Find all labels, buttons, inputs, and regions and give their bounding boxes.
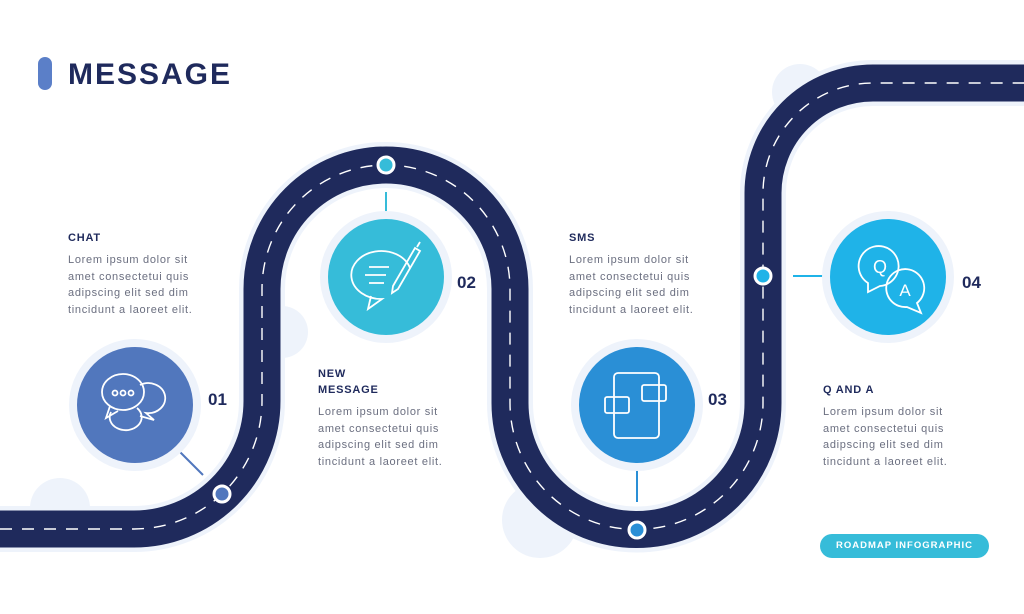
text: new message: tincidunt a laoreet elit. — [318, 456, 443, 468]
circle 04: q and a — [822, 211, 954, 343]
text: q and a: tincidunt a laoreet elit. — [823, 456, 948, 468]
text: new message: adipscing elit sed dim — [318, 439, 439, 451]
text: new message: amet consectetui quis — [318, 422, 439, 434]
roadmap badge — [820, 534, 989, 558]
circle 01: chat — [69, 339, 201, 471]
numbers: 01 — [208, 390, 227, 409]
text: chat: adipscing elit sed dim — [68, 287, 189, 299]
text: chat: amet consectetui quis — [68, 270, 189, 282]
node markers — [214, 157, 771, 538]
text: q and a: amet consectetui quis — [823, 422, 944, 434]
title: MESSAGE — [68, 58, 232, 91]
text: new message: NEW — [318, 368, 346, 380]
text: sms: Lorem ipsum dolor sit — [569, 254, 689, 266]
roadmap badge: ROADMAP INFOGRAPHIC — [836, 540, 973, 551]
connectors — [176, 192, 832, 502]
text: chat: tincidunt a laoreet elit. — [68, 304, 193, 316]
text: sms: amet consectetui quis — [569, 270, 690, 282]
circle 02: new message — [320, 211, 452, 343]
text: sms: SMS — [569, 232, 595, 244]
text: q and a — [823, 384, 948, 468]
text: q and a: adipscing elit sed dim — [823, 439, 944, 451]
text: chat: CHAT — [68, 232, 101, 244]
text: new message: MESSAGE — [318, 384, 379, 396]
text: chat — [68, 232, 193, 316]
text: 04 — [962, 273, 981, 292]
text: new message: Lorem ipsum dolor sit — [318, 406, 438, 418]
text: sms: tincidunt a laoreet elit. — [569, 304, 694, 316]
text: q and a: Q AND A — [823, 384, 874, 396]
text: sms: adipscing elit sed dim — [569, 287, 690, 299]
road — [0, 83, 1024, 530]
text: new message — [318, 368, 443, 468]
text: sms — [569, 232, 694, 316]
text: 02 — [457, 273, 476, 292]
circle 04: q and a: Q — [873, 257, 887, 277]
text: chat: Lorem ipsum dolor sit — [68, 254, 188, 266]
circle 03: sms — [571, 339, 703, 471]
circle 04: q and a: A — [899, 281, 911, 300]
text: q and a: Lorem ipsum dolor sit — [823, 406, 943, 418]
text: 03 — [708, 390, 727, 409]
